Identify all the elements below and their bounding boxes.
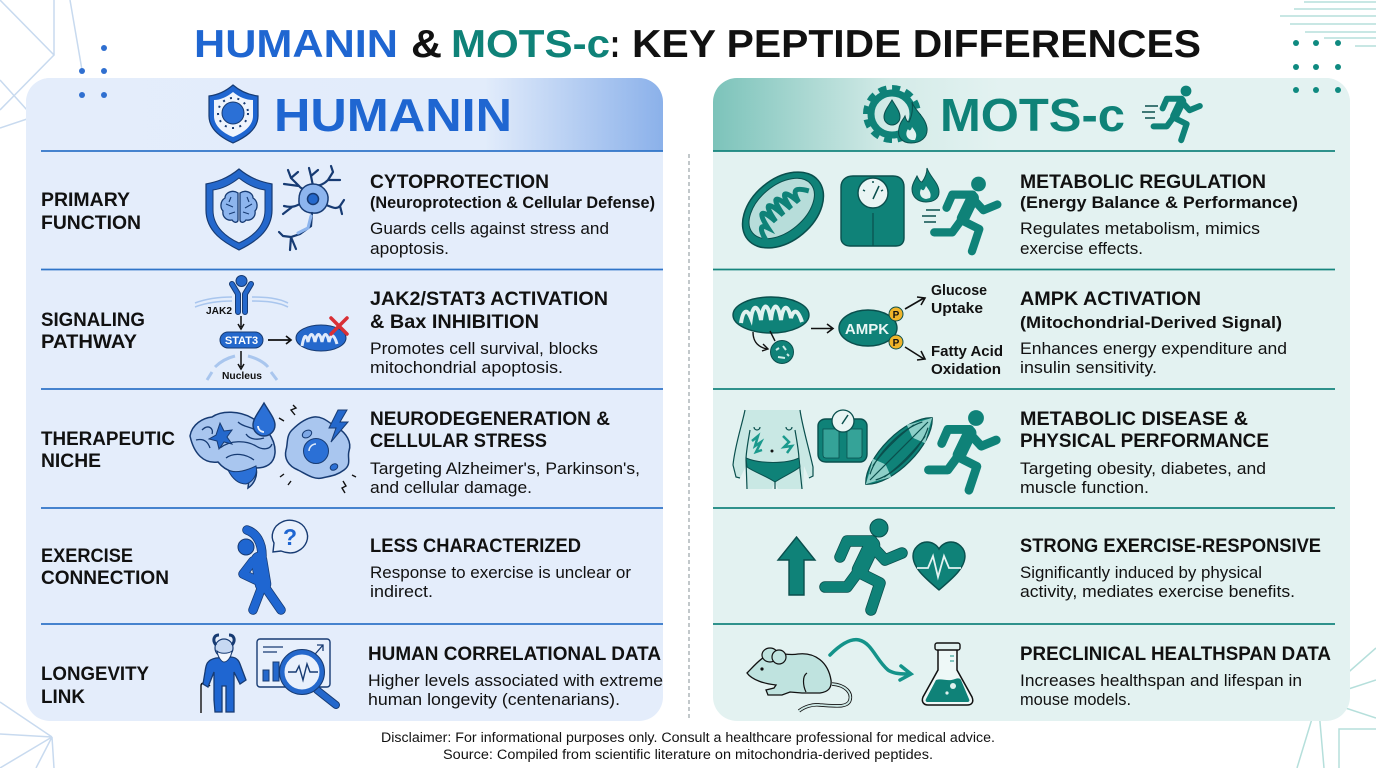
text: Increases healthspan and lifespan in [1020, 672, 1302, 690]
row: primary function [41, 166, 655, 258]
text: mouse models. [1020, 691, 1131, 709]
label: EXERCISE [41, 545, 133, 567]
icon: brain with drop [190, 403, 275, 488]
icon: side-stretching figure: ? [283, 524, 297, 550]
icon: heart with pulse [913, 542, 965, 590]
icon: weighing scale [841, 176, 904, 246]
label: PRIMARY [41, 189, 130, 211]
text: METABOLIC REGULATION [1020, 171, 1266, 193]
text: (Neuroprotection & Cellular Defense) [370, 193, 655, 212]
diagram: AMPK pathway: P [893, 338, 900, 349]
row: metabolic regulation [728, 157, 1298, 263]
text: activity, mediates exercise benefits. [1020, 583, 1295, 601]
icon: torso [733, 410, 813, 489]
text: (Energy Balance & Performance) [1020, 193, 1298, 212]
row: preclinical data [747, 640, 1331, 711]
diagram: AMPK pathway: P [893, 310, 900, 321]
text: HUMAN CORRELATIONAL DATA [368, 643, 661, 665]
decorative dots right [1293, 40, 1341, 93]
title: HUMANIN [194, 23, 398, 66]
panel: humanin [26, 78, 663, 721]
heading: MOTS-c: MOTS-c [940, 89, 1125, 141]
label: FUNCTION [41, 212, 141, 234]
text: AMPK ACTIVATION [1020, 288, 1201, 310]
text: Enhances energy expenditure and [1020, 340, 1287, 358]
diagram: JAK2 STAT3 [195, 276, 347, 382]
title: MOTS-c [451, 23, 610, 66]
diagram: AMPK pathway [733, 283, 1003, 378]
icon: runner [922, 177, 997, 251]
text: CELLULAR STRESS [370, 430, 547, 452]
row: longevity link [41, 635, 663, 713]
header: humanin [26, 78, 663, 151]
text: insulin sensitivity. [1020, 359, 1157, 377]
icon: shield with brain [206, 169, 272, 250]
icon: up arrow [778, 537, 815, 595]
footer: disclaimer and source: Source: Compiled from scientific literature on mitochondria-derived peptides. [443, 747, 933, 762]
icon: data chart with magnifier [257, 639, 336, 705]
icon: mouse [747, 648, 850, 711]
diagram: AMPK pathway: AMPK [845, 321, 889, 338]
text: Targeting obesity, diabetes, and [1020, 460, 1266, 478]
text: CYTOPROTECTION [370, 171, 549, 193]
text: STRONG EXERCISE-RESPONSIVE [1020, 535, 1321, 557]
text: Response to exercise is unclear or [370, 564, 632, 582]
text: Regulates metabolism, mimics [1020, 220, 1260, 238]
text: and cellular damage. [370, 479, 532, 497]
decorative corner lines [0, 0, 82, 768]
icon: neuron [279, 166, 344, 250]
text: (Mitochondrial-Derived Signal) [1020, 313, 1282, 332]
text: exercise effects. [1020, 240, 1143, 258]
row: signaling pathway [41, 276, 608, 382]
text: LESS CHARACTERIZED [370, 535, 581, 557]
diagram: JAK2 STAT3: STAT3 [225, 335, 258, 347]
row: therapeutic niche [41, 403, 640, 497]
title: KEY PEPTIDE DIFFERENCES [632, 23, 1201, 66]
title: & [411, 23, 442, 66]
text: Higher levels associated with extreme [368, 672, 663, 690]
icon: gear with drop and flame [866, 88, 927, 143]
icon: shield with cell [209, 85, 258, 143]
label: NICHE [41, 450, 101, 472]
text: & Bax INHIBITION [370, 311, 539, 333]
row: AMPK activation [733, 283, 1287, 378]
icon: elderly person [201, 635, 246, 713]
label: CONNECTION [41, 567, 169, 589]
label: LONGEVITY [41, 663, 149, 685]
diagram: AMPK pathway: Oxidation [931, 362, 1001, 378]
icon: runner [825, 519, 902, 610]
row: exercise connection [41, 520, 632, 610]
arrow [830, 640, 911, 680]
header: MOTS-c [713, 78, 1350, 151]
decorative dots left [79, 45, 107, 98]
icon: side-stretching figure [238, 520, 308, 610]
text: apoptosis. [370, 240, 449, 258]
label: LINK [41, 686, 85, 708]
text: METABOLIC DISEASE & [1020, 408, 1248, 430]
label: SIGNALING [41, 309, 145, 331]
text: human longevity (centenarians). [368, 691, 620, 709]
text: PHYSICAL PERFORMANCE [1020, 430, 1269, 452]
text: indirect. [370, 583, 433, 601]
panel: MOTS-c [713, 78, 1350, 721]
diagram: AMPK pathway: Uptake [931, 301, 983, 317]
diagram: JAK2 STAT3: Nucleus [222, 370, 262, 382]
diagram: AMPK pathway: Glucose [931, 283, 987, 299]
row: metabolic disease [733, 407, 1269, 497]
row: exercise responsive [778, 519, 1321, 610]
icon: runner [928, 410, 996, 490]
text: Guards cells against stress and [370, 220, 609, 238]
diagram: JAK2 STAT3: JAK2 [206, 305, 232, 317]
icon: muscle [855, 407, 943, 495]
text: NEURODEGENERATION & [370, 408, 610, 430]
icon: flame [912, 168, 939, 202]
title: : [610, 23, 620, 66]
text: muscle function. [1020, 479, 1149, 497]
icon: stressed cell [279, 405, 356, 493]
icon: runner [1142, 86, 1200, 140]
diagram: AMPK pathway: Fatty Acid [931, 344, 1003, 360]
text: Targeting Alzheimer's, Parkinson's, [370, 460, 640, 478]
divider [688, 154, 690, 720]
heading: HUMANIN: HUMANIN [274, 89, 512, 141]
label: THERAPEUTIC [41, 428, 175, 450]
label: PATHWAY [41, 331, 137, 353]
icon: mitochondrion [728, 157, 838, 263]
text: JAK2/STAT3 ACTIVATION [370, 288, 608, 310]
text: Promotes cell survival, blocks [370, 340, 598, 358]
icon: weighing scale [818, 410, 867, 462]
text: Significantly induced by physical [1020, 564, 1262, 582]
icon: flask [922, 643, 973, 705]
text: mitochondrial apoptosis. [370, 359, 563, 377]
footer: disclaimer and source: Disclaimer: For informational purposes only. Consult a healthcare professional for medical advice. [381, 730, 995, 745]
text: PRECLINICAL HEALTHSPAN DATA [1020, 643, 1331, 665]
